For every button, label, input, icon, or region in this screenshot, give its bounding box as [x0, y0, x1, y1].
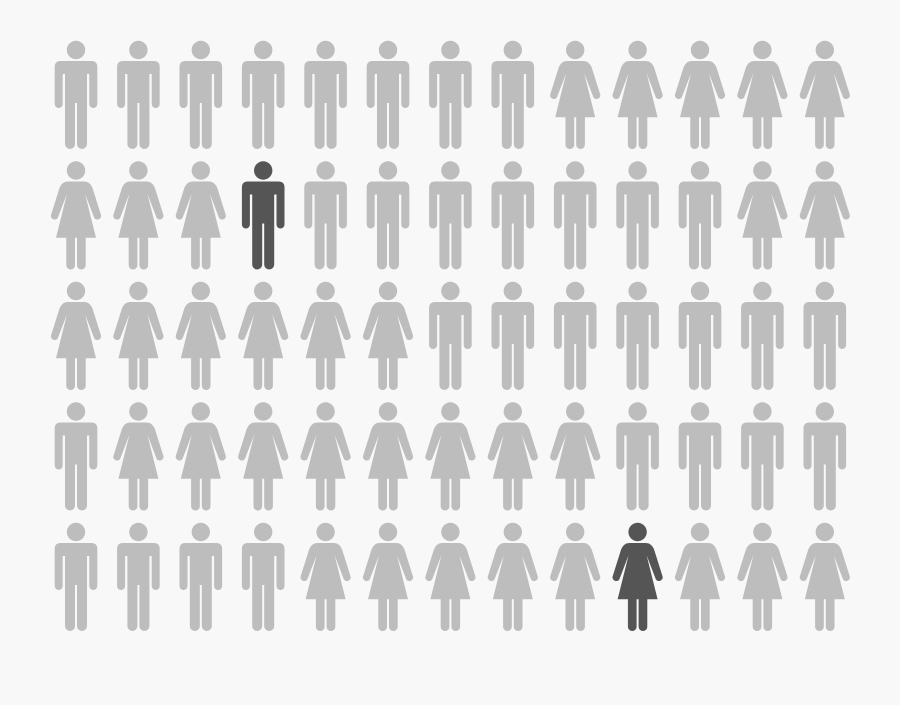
icon: man: [242, 523, 284, 631]
row 3: six women, seven men: [51, 282, 846, 390]
icon: woman: [51, 161, 101, 270]
icon: woman: [800, 523, 850, 631]
icon: man: [492, 161, 534, 270]
row 4: one man, eight women, four men: [55, 402, 846, 511]
icon: woman: [488, 523, 538, 631]
icon: man: [616, 402, 659, 510]
icon: woman: [425, 402, 475, 511]
icon: man: [679, 402, 721, 510]
icon: man: [492, 282, 534, 390]
icon: woman: [238, 402, 288, 511]
icon: man: [367, 41, 409, 149]
icon: woman: [363, 523, 413, 631]
icon: woman: [613, 41, 663, 149]
icon: woman: [113, 402, 163, 511]
icon: woman: [51, 282, 101, 390]
icon: man: [492, 41, 534, 149]
icon: woman: [800, 41, 850, 149]
icon: man: [616, 161, 659, 270]
icon: woman: [238, 282, 288, 390]
icon: man: [55, 523, 97, 631]
icon: woman: [550, 41, 600, 149]
icon: man: [304, 161, 347, 270]
icon: woman: [737, 161, 787, 270]
icon: man: [429, 161, 472, 270]
icon: man: [117, 41, 160, 149]
icon: man: [679, 161, 721, 270]
icon: highlighted man: [242, 161, 284, 270]
icon: woman: [550, 402, 600, 511]
icon: woman: [113, 161, 163, 270]
icon: woman: [675, 523, 725, 631]
icon: man: [429, 282, 472, 390]
icon: man: [180, 41, 222, 149]
icon: woman: [363, 282, 413, 390]
icon: man: [554, 161, 596, 270]
icon: woman: [301, 523, 351, 631]
icon: woman: [800, 161, 850, 270]
icon: woman: [176, 282, 226, 390]
icon: woman: [176, 161, 226, 270]
icon: man: [429, 41, 472, 149]
icon: woman: [301, 282, 351, 390]
icon: man: [367, 161, 409, 270]
icon: woman: [737, 41, 787, 149]
row 2: three women, highlighted man, seven men, two women: [51, 161, 850, 270]
icon: woman: [737, 523, 787, 631]
icon: woman: [176, 402, 226, 511]
icon: man: [180, 523, 222, 631]
icon: man: [741, 282, 784, 390]
pictogram grid: [51, 41, 850, 631]
icon: man: [55, 41, 97, 149]
row 1: eight men, five women: [55, 41, 850, 149]
icon: woman: [488, 402, 538, 511]
icon: woman: [113, 282, 163, 390]
icon: man: [679, 282, 721, 390]
icon: woman: [425, 523, 475, 631]
icon: woman: [301, 402, 351, 511]
icon: man: [242, 41, 284, 149]
icon: man: [804, 282, 846, 390]
icon: highlighted woman: [613, 523, 663, 631]
row 5: four men, five women, highlighted woman, three women: [55, 523, 850, 631]
icon: man: [55, 402, 97, 510]
icon: man: [741, 402, 784, 510]
icon: woman: [363, 402, 413, 511]
icon: man: [117, 523, 160, 631]
icon: woman: [550, 523, 600, 631]
icon: woman: [675, 41, 725, 149]
icon: man: [804, 402, 846, 510]
icon: man: [616, 282, 659, 390]
icon: man: [304, 41, 347, 149]
icon: man: [554, 282, 596, 390]
